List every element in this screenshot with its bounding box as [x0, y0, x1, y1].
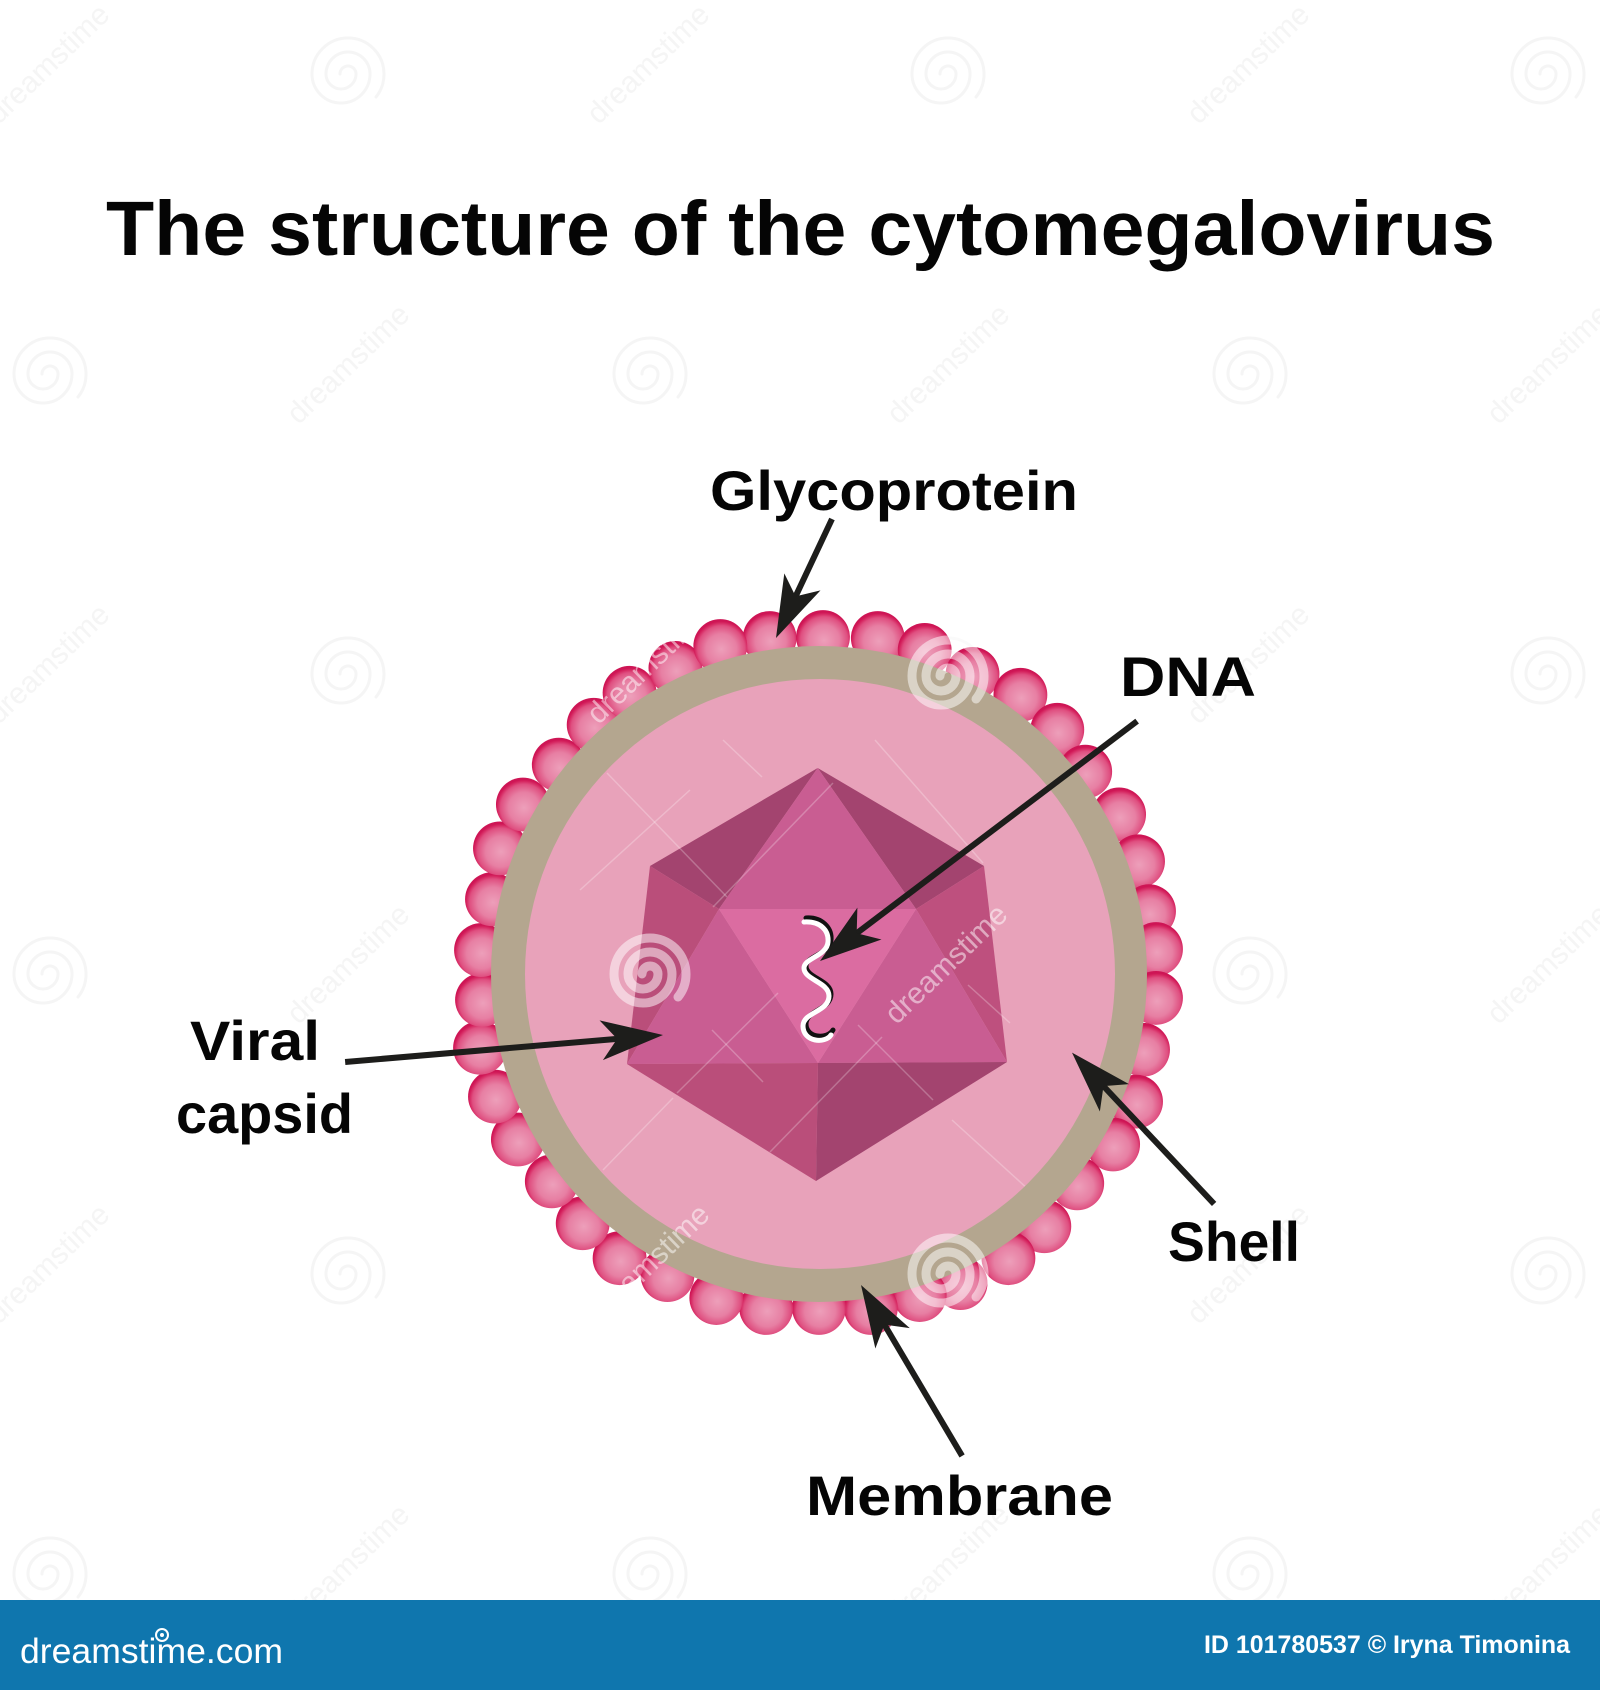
watermark: overlay on diagram: dreamstime: [879, 898, 1014, 1030]
label: Glycoprotein: Glycoprotein: [710, 459, 1078, 522]
label: Membrane: Membrane: [806, 1464, 1113, 1527]
watermark: overlay on diagram: dreamstime: [581, 598, 716, 730]
watermark: faint background pattern: dreamstime: [1181, 1198, 1316, 1330]
glycoprotein spheres: [453, 610, 1183, 1335]
membrane interior disc: [525, 679, 1115, 1269]
label: DNA: DNA: [1120, 645, 1256, 708]
watermark: faint background pattern: dreamstime: [281, 298, 416, 430]
arrow: to viral capsid: [343, 1015, 665, 1082]
label: Viral capsid: capsid: [176, 1082, 353, 1145]
watermark: faint background pattern: dreamstime: [281, 898, 416, 1030]
watermark: faint background pattern: dreamstime: [881, 298, 1016, 430]
watermark: faint background pattern: dreamstime: [1181, 0, 1316, 130]
DNA strand: [803, 918, 833, 1040]
watermark: faint background pattern: dreamstime: [581, 0, 716, 130]
label: Shell: Shell: [1168, 1210, 1300, 1273]
watermark: overlay on diagram: dreamstime: [581, 1198, 716, 1330]
arrow: to DNA: [808, 705, 1149, 977]
arrow: to membrane: [844, 1275, 979, 1466]
arrow: to shell: [1057, 1039, 1229, 1218]
label: Viral capsid: [176, 1009, 353, 1145]
label: Viral capsid: Viral: [190, 1009, 320, 1072]
watermark: faint background pattern: dreamstime: [281, 1498, 416, 1630]
footer logo: dreamstime.com: [20, 1632, 283, 1671]
watermark: faint background pattern: dreamstime: [881, 1498, 1016, 1630]
arrow: to glycoprotein: [758, 510, 850, 647]
title: The structure of the cytomegalovirus: [106, 186, 1495, 272]
watermark: overlay on diagram: [580, 598, 1040, 1330]
footer bar: [0, 1600, 1600, 1690]
footer credit: ID 101780537 © Iryna Timonina: [1204, 1631, 1571, 1659]
shell ring: [491, 646, 1147, 1302]
watermark: faint background pattern: dreamstime: [1181, 598, 1316, 730]
virus diagram: [453, 610, 1183, 1335]
icosahedral capsid: [627, 768, 1007, 1181]
